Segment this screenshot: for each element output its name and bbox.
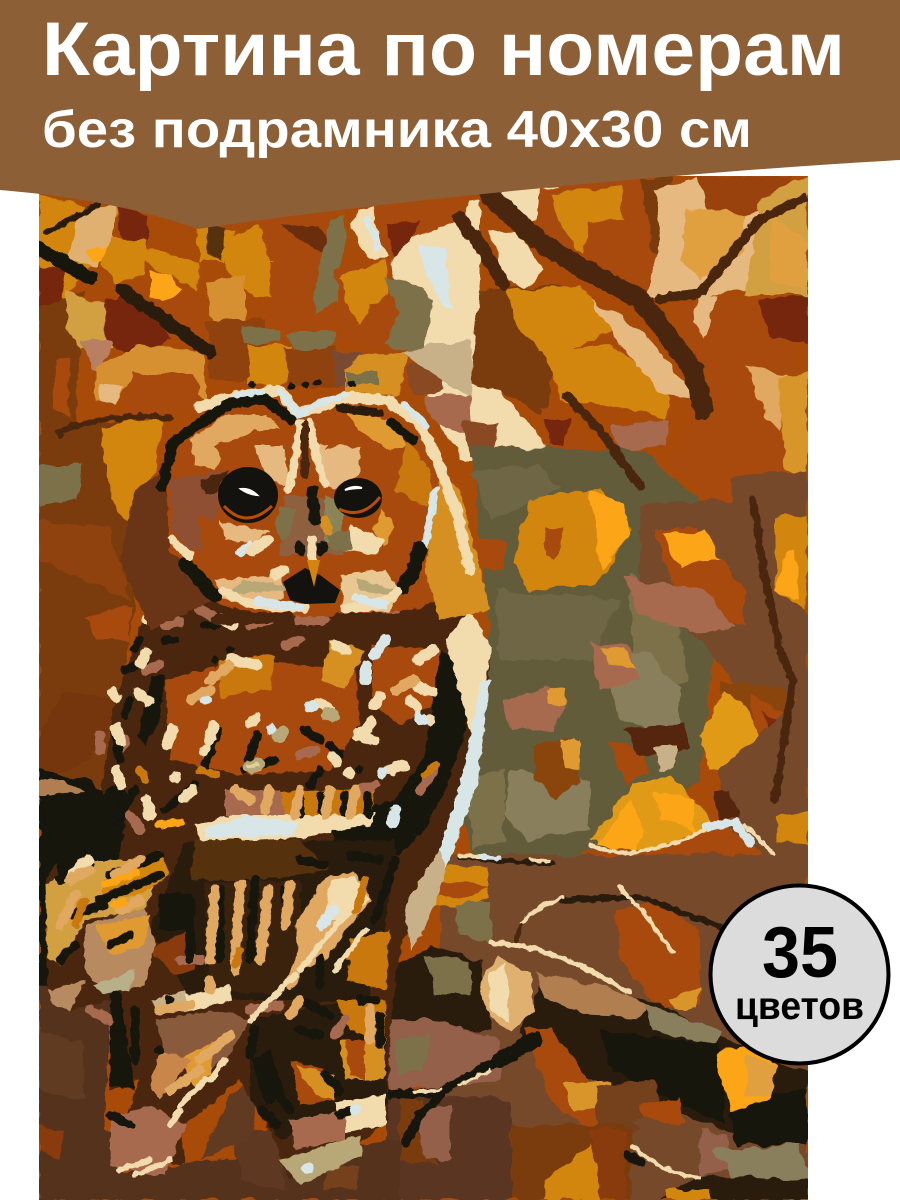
head base (202, 412, 435, 618)
rim stripes (440, 610, 492, 850)
title: Картина по номерам (42, 7, 845, 92)
black eye arcs (162, 400, 292, 487)
cream dabs (73, 610, 433, 875)
khaki flank (152, 990, 190, 1012)
body base (45, 590, 492, 1180)
banner (0, 0, 900, 229)
right hand leaves (640, 500, 808, 700)
owl feather mottling (60, 610, 435, 1175)
owl eyes (218, 467, 382, 523)
number: 35 (762, 913, 838, 993)
owl head (120, 406, 490, 630)
brown dabs (90, 610, 435, 1035)
chest band (195, 812, 375, 843)
owl face disc: outlines and beak (162, 383, 470, 620)
top left leaves (39, 195, 120, 300)
centre light streak (350, 200, 480, 460)
painting: owl in autumn leaves (39, 176, 808, 1200)
black stripes (138, 675, 165, 745)
olive middle ground (455, 445, 720, 860)
left wing (45, 860, 160, 965)
blue and khaki accents (206, 640, 422, 1168)
left margin (39, 420, 150, 800)
background: autumn foliage (39, 176, 808, 1200)
lower breast (150, 840, 395, 1000)
dark spots above head (252, 383, 352, 386)
owl beak (283, 560, 340, 604)
badge: 35 colours (710, 886, 888, 1064)
background: dark branches (39, 196, 803, 1178)
black right rim (330, 650, 468, 855)
gold accents (105, 822, 182, 905)
subtitle: без подрамника 40х30 см (42, 101, 752, 159)
rust plumage (165, 660, 360, 775)
facial centre lines (288, 423, 325, 490)
cream face rim (200, 390, 470, 570)
label: цветов (735, 985, 864, 1028)
top right leaves (500, 187, 559, 222)
owl body (39, 590, 492, 1185)
lower right ground (440, 855, 808, 1200)
tail (250, 1000, 388, 1140)
lower rim (222, 590, 398, 609)
